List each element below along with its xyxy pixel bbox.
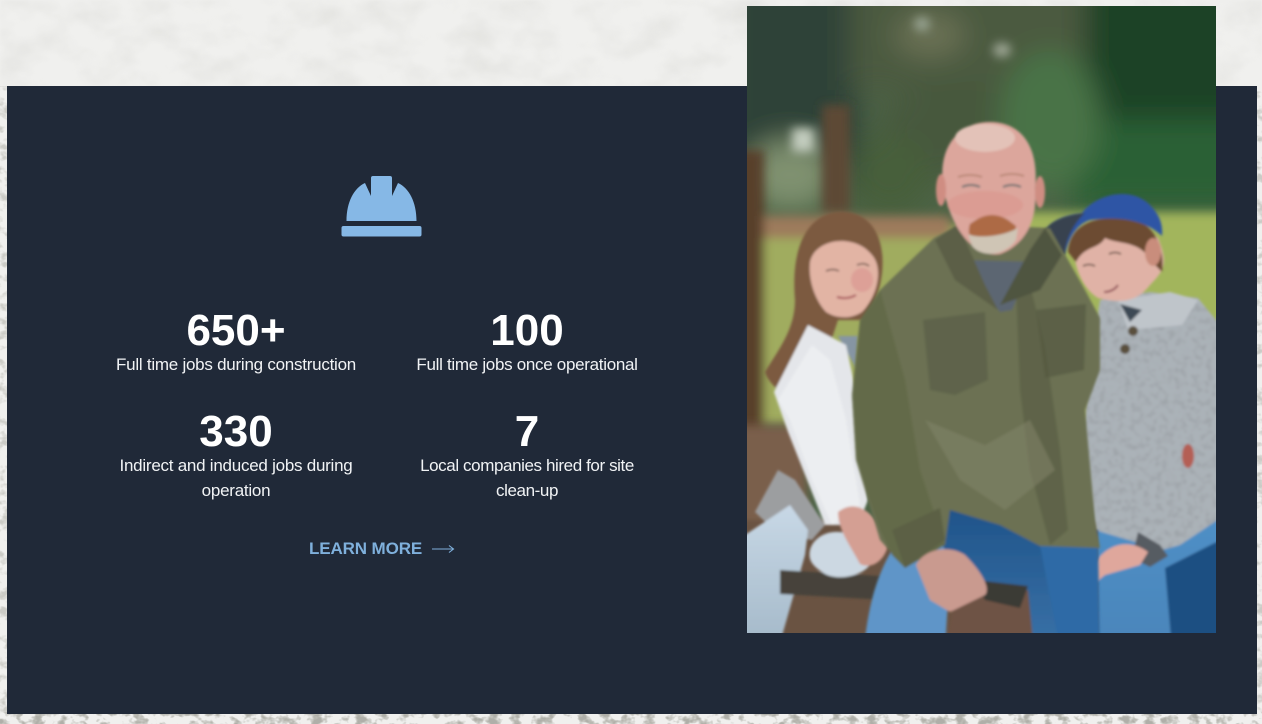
stat: 650+	[116, 306, 356, 374]
icon: arrow	[432, 545, 454, 553]
stat label: clean-up	[496, 481, 558, 500]
stat label	[420, 456, 634, 500]
photo: father with two children	[747, 6, 1216, 633]
stat label: Full time jobs once operational	[416, 355, 638, 374]
stat number: 7	[515, 407, 539, 456]
stat number: 330	[199, 407, 273, 456]
stat: 330	[120, 407, 352, 500]
stat label: Indirect and induced jobs during	[120, 456, 352, 475]
stat: 7	[420, 407, 634, 500]
stat label: Local companies hired for site	[420, 456, 634, 475]
stat number: 100	[490, 306, 564, 355]
link text: LEARN MORE	[309, 539, 422, 558]
stat: 100	[416, 306, 638, 374]
stat label	[120, 456, 352, 500]
stat label: operation	[202, 481, 270, 500]
stat number: 650+	[186, 306, 286, 355]
stat label: Full time jobs during construction	[116, 355, 356, 374]
learn more link	[309, 539, 454, 558]
man	[852, 122, 1100, 650]
girl	[730, 212, 1028, 650]
icon: hard hat	[342, 176, 422, 236]
photo backdrop	[720, 0, 1255, 645]
boy	[1042, 194, 1240, 650]
